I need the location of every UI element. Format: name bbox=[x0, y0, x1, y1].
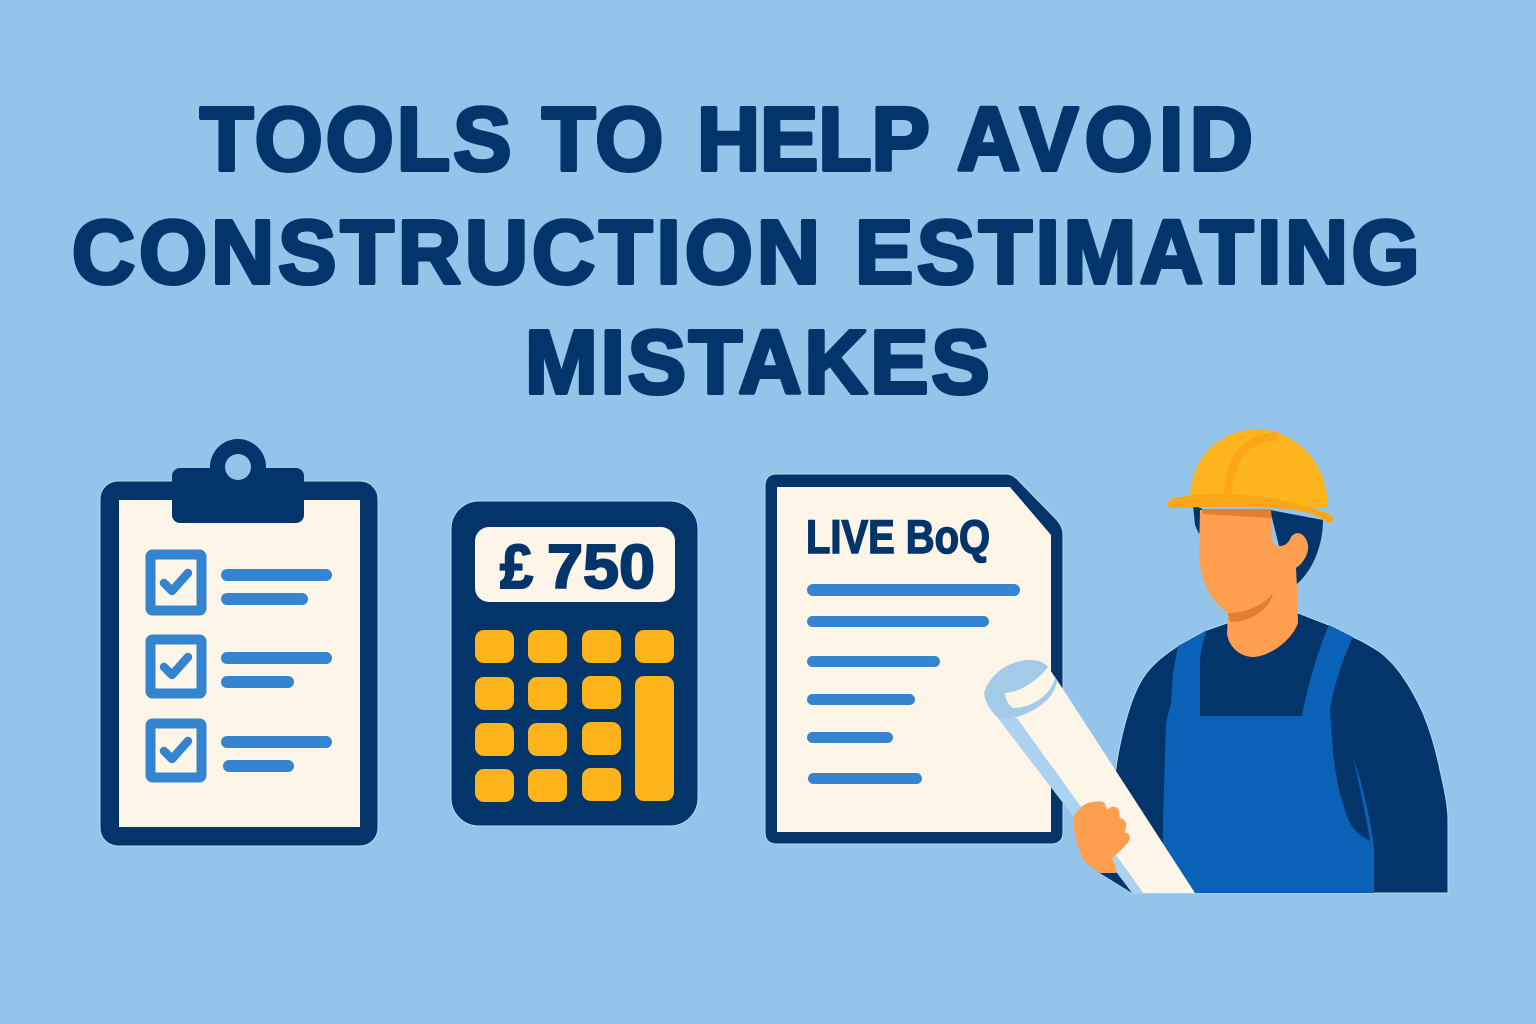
screen amount bbox=[500, 533, 655, 602]
title: ESTIMATING bbox=[855, 202, 1420, 302]
blueprint roll opening bbox=[1005, 667, 1055, 708]
hard hat brim bbox=[1167, 494, 1333, 523]
document paper bbox=[777, 487, 1051, 832]
torso and sleeves bbox=[1099, 613, 1448, 893]
icon: live bill of quantities document bbox=[765, 474, 1063, 844]
document outline bbox=[765, 474, 1063, 844]
blueprint roll body bbox=[1017, 667, 1195, 893]
title: AVOID bbox=[957, 89, 1253, 189]
neck and face bbox=[1199, 510, 1308, 657]
document heading: LIVE BoQ bbox=[806, 510, 990, 563]
title bbox=[72, 89, 1420, 412]
hard hat dome bbox=[1190, 429, 1328, 508]
calculator screen bbox=[475, 527, 675, 602]
rolled blueprint bbox=[984, 660, 1195, 893]
calculator body bbox=[451, 501, 698, 826]
title: MISTAKES bbox=[525, 312, 990, 412]
forehead shadow bbox=[1202, 509, 1271, 518]
checklist row 2 bbox=[150, 640, 332, 694]
hard hat ridge bbox=[1228, 436, 1278, 496]
hair bbox=[1193, 505, 1323, 584]
overalls bbox=[1163, 625, 1374, 893]
checklist row 1 bbox=[150, 554, 332, 610]
title: HELP bbox=[697, 89, 930, 189]
title: CONSTRUCTION bbox=[72, 202, 820, 302]
screen amount: 750 bbox=[547, 533, 655, 602]
title: TO bbox=[542, 89, 663, 189]
title: TOOLS bbox=[200, 89, 511, 189]
icon: clipboard checklist bbox=[100, 439, 378, 846]
blueprint edge stripe bbox=[997, 717, 1143, 893]
clipboard board bbox=[100, 481, 378, 846]
calculator keys bbox=[475, 630, 674, 802]
document lines bbox=[807, 584, 1020, 784]
chin shadow bbox=[1228, 593, 1273, 622]
illustration: construction worker bbox=[984, 429, 1448, 893]
icon: calculator bbox=[451, 501, 698, 826]
checklist row 3 bbox=[150, 724, 332, 778]
blueprint roll end bbox=[984, 660, 1057, 718]
clip bbox=[172, 439, 304, 523]
hand bbox=[1073, 801, 1132, 893]
paper sheet bbox=[119, 500, 360, 827]
screen amount: £ bbox=[500, 533, 533, 602]
